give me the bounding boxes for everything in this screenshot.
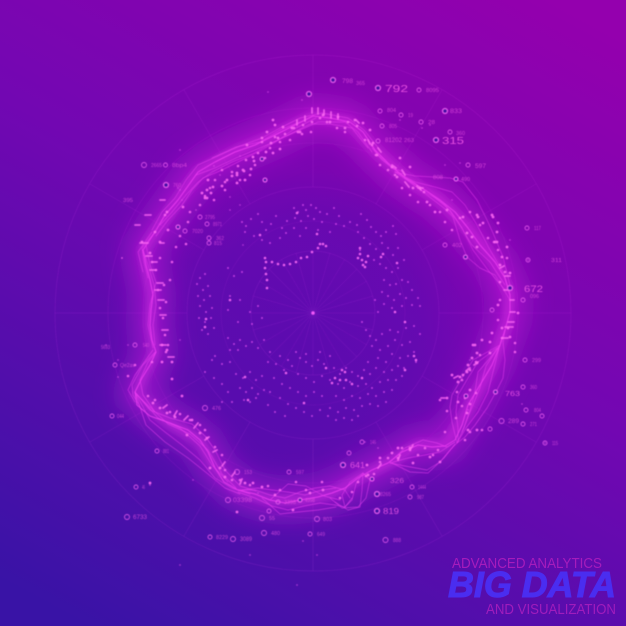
title block [448, 555, 616, 618]
data labels: 28 [428, 120, 435, 126]
inner disk data points [197, 205, 420, 420]
data labels: 46 [142, 485, 145, 491]
data labels: 8229 [216, 535, 228, 541]
data labels: 096 [530, 294, 539, 300]
large value: 792: 792 [385, 83, 408, 95]
dark inner disk [163, 170, 463, 470]
data labels: 833 [450, 108, 462, 115]
polar grid [55, 55, 571, 571]
data labels: 808 [433, 175, 443, 181]
data labels: 804 [534, 408, 541, 414]
data labels: 117 [534, 226, 541, 232]
data labels: 649 [317, 532, 325, 538]
data labels: 03398 [233, 498, 253, 504]
data labels: 987 [417, 495, 424, 501]
data labels: 6733 [133, 515, 148, 521]
data labels: 311 [551, 258, 562, 264]
data labels [101, 78, 562, 544]
bundle: bottom ripple [238, 484, 350, 514]
data labels: 402 [452, 243, 462, 249]
data labels: 146 [370, 440, 376, 446]
data labels: 8971 [213, 222, 222, 228]
data labels: 263 [404, 138, 414, 144]
heading: big data: BIG DATA [448, 564, 616, 605]
data labels: 4998 [305, 498, 315, 504]
data labels: 490 [461, 177, 470, 183]
data labels: 2795 [205, 215, 215, 221]
data labels: 476 [212, 406, 221, 412]
data labels: 81202 [385, 137, 402, 144]
heading: advanced analytics: ADVANCED ANALYTICS [452, 555, 602, 572]
data labels: 888 [393, 538, 401, 544]
data labels: 8095 [426, 88, 439, 94]
data labels: 805 [389, 124, 397, 130]
data labels: 5693 [101, 345, 110, 351]
data labels: 597 [296, 470, 304, 476]
bundle: upper arc [152, 113, 380, 236]
data labels: 2665 [151, 163, 162, 169]
data labels: 803 [323, 517, 332, 523]
data labels: 597 [475, 164, 487, 170]
data labels: 760 [173, 183, 181, 189]
data labels: 55 [269, 516, 275, 522]
ring data points [106, 92, 545, 585]
large value: 819: 819 [383, 507, 400, 516]
data labels: 804 [387, 108, 396, 114]
data labels: 1444 [418, 485, 426, 491]
bundle: right lobe [450, 330, 505, 443]
data labels: 3089 [240, 537, 253, 543]
ring glow [136, 116, 510, 500]
data labels: 289 [508, 419, 520, 425]
data labels: 8bp4 [172, 163, 187, 169]
data labels: 815 [214, 241, 222, 247]
wave ring strands [128, 113, 510, 514]
data markers [110, 78, 547, 542]
data labels: 480 [271, 531, 280, 537]
data labels: 362 [216, 236, 224, 242]
bundle: lower left [128, 350, 256, 494]
data labels: 299 [532, 358, 541, 364]
large value: 641: 641 [350, 461, 366, 470]
data labels: 798 [342, 78, 353, 85]
large value: 763: 763 [505, 389, 520, 398]
data labels: 395 [123, 198, 133, 204]
extra ring dots [142, 115, 518, 512]
data labels: Qe2av [120, 363, 135, 369]
large value: 315: 315 [442, 135, 464, 147]
data labels: 3398 [284, 500, 296, 506]
data labels: 153 [244, 470, 252, 476]
data labels: 360 [456, 131, 465, 137]
bundle: left flank [138, 232, 156, 348]
data labels: 540 [143, 343, 149, 349]
main strand [135, 116, 510, 503]
data labels: 7020 [192, 229, 203, 235]
data labels: 271 [530, 422, 537, 428]
large value: 326: 326 [390, 476, 404, 485]
data labels: 19 [408, 113, 413, 119]
data labels: 115 [552, 441, 558, 447]
bundle: upper right lobe [365, 135, 510, 300]
data labels: 8265 [380, 492, 391, 498]
data labels: 360 [530, 385, 537, 391]
large value: 672: 672 [524, 284, 543, 294]
data labels: 044 [117, 414, 124, 420]
bundle: lower right lobes [330, 440, 457, 510]
data labels: 881 [163, 449, 169, 455]
data labels: 365 [356, 81, 365, 87]
